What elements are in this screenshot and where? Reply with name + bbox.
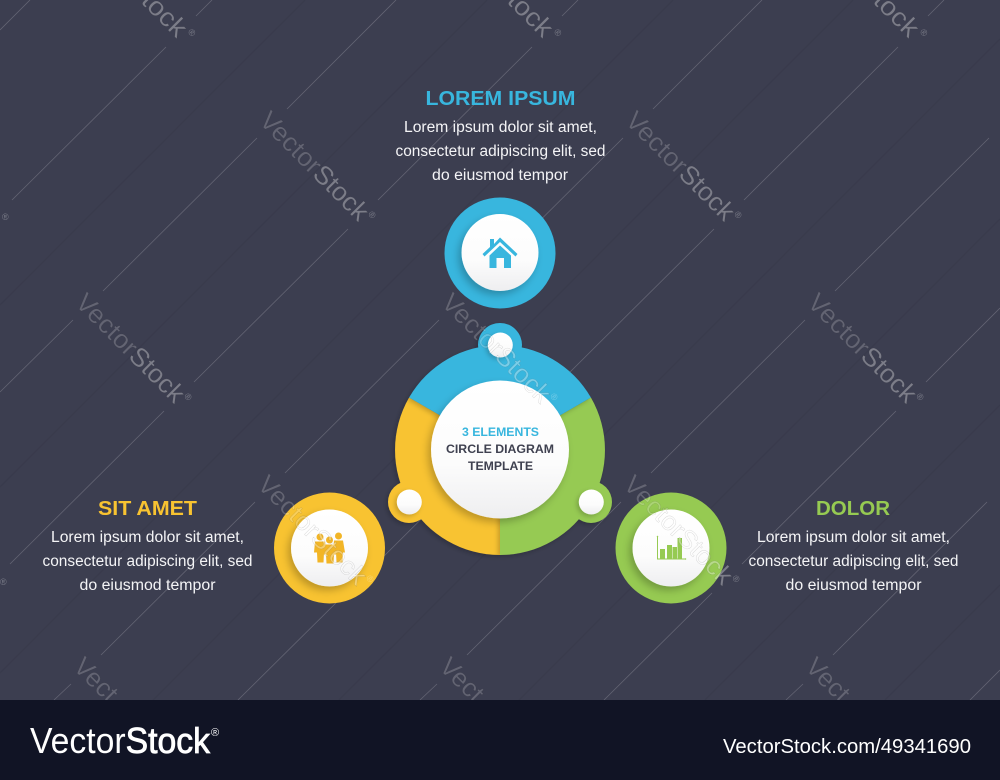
green element circle with chart icon: [616, 492, 726, 604]
center label: 3 ELEMENTS: [462, 425, 539, 439]
footer image id: VectorStock.com/49341690: [723, 736, 971, 758]
watermarks: ®: [2, 212, 9, 222]
watermarks: VectorStock: [252, 469, 374, 591]
watermarks: ®: [366, 209, 378, 221]
white knob: top: [488, 332, 513, 358]
heading: lorem ipsum: LOREM IPSUM: [426, 88, 576, 110]
yellow element circle with people icon: [274, 492, 385, 604]
text block: lorem ipsum description: Lorem ipsum dolor sit amet,: [404, 119, 597, 136]
white knob: right: [579, 490, 604, 514]
watermarks: VectorStock: [618, 469, 740, 591]
central three-part ring diagram: [388, 323, 612, 555]
icon: people: [314, 532, 345, 564]
center label: CIRCLE DIAGRAM: [446, 442, 554, 456]
heading: dolor: DOLOR: [816, 498, 891, 520]
text block: lorem ipsum description: consectetur adipiscing elit, sed: [396, 143, 606, 160]
text block: dolor description: do eiusmod tempor: [786, 577, 922, 594]
text block: dolor description: Lorem ipsum dolor sit amet,: [757, 529, 950, 546]
watermarks: ®: [182, 391, 194, 403]
watermarks: Vect: [68, 651, 125, 709]
watermarks: VectorStock: [254, 105, 376, 227]
watermarks: VectorStock: [802, 287, 924, 409]
center white disc: [431, 380, 569, 518]
watermarks: Vect: [434, 651, 491, 709]
watermarks: ®: [732, 209, 744, 221]
text block: dolor description: consectetur adipiscing elit, sed: [748, 553, 958, 570]
center label: TEMPLATE: [468, 459, 533, 473]
text block: dolor description: [748, 529, 958, 594]
footer logo: VectorStock: [30, 720, 211, 761]
watermarks: ®: [186, 27, 198, 39]
blue element circle with house icon: [444, 198, 556, 308]
watermarks: ®: [918, 27, 930, 39]
watermarks: VectorStock: [70, 287, 192, 409]
icon: bar chart: [656, 536, 686, 560]
center label: [446, 425, 554, 473]
ring segment: yellow with knob: [388, 398, 500, 555]
ring segment: green with knob: [500, 398, 612, 555]
watermarks: ®: [548, 391, 560, 403]
watermarks: VectorStock: [620, 105, 742, 227]
watermarks: ®: [364, 573, 376, 585]
heading: sit amet: SIT AMET: [98, 498, 197, 520]
watermarks: ®: [552, 27, 564, 39]
watermarks: ®: [914, 391, 926, 403]
icon: house: [482, 238, 518, 268]
watermarks: ®: [730, 573, 742, 585]
text block: sit amet description: [42, 529, 252, 594]
watermarks: Vect: [800, 651, 857, 709]
text block: lorem ipsum description: do eiusmod tempor: [432, 167, 568, 184]
ring segment: blue with knob: [409, 323, 591, 450]
watermarks: ®: [0, 577, 7, 587]
white knob: left: [397, 490, 422, 514]
footer bar: [0, 700, 1000, 780]
text block: sit amet description: Lorem ipsum dolor sit amet,: [51, 529, 244, 546]
text block: lorem ipsum description: [396, 119, 606, 184]
footer logo: ®: [211, 727, 219, 739]
text block: sit amet description: do eiusmod tempor: [80, 577, 216, 594]
watermarks: VectorStock: [436, 287, 558, 409]
text block: sit amet description: consectetur adipiscing elit, sed: [42, 553, 252, 570]
